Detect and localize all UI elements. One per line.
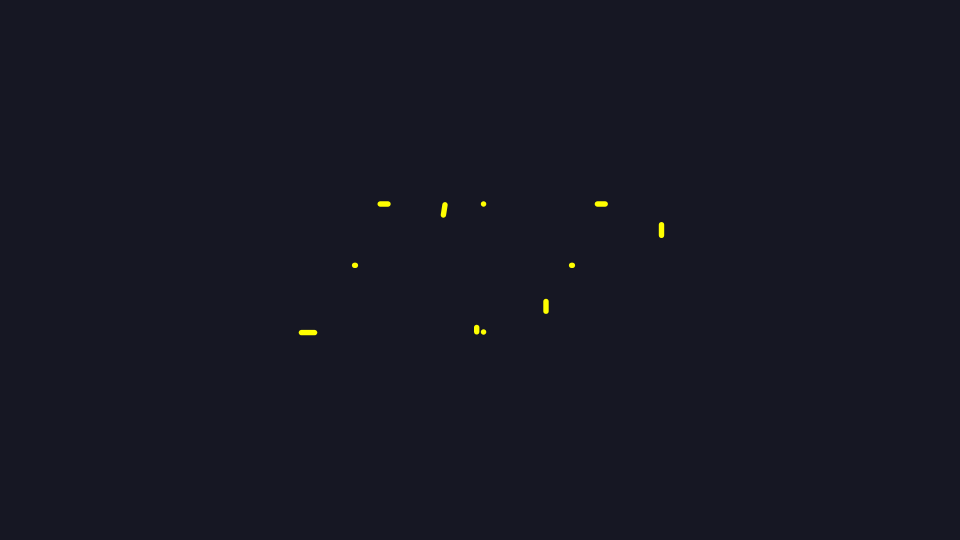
mark: bottom centre dot: [481, 329, 486, 335]
mark: tilted dash: [443, 205, 445, 215]
mark: bottom-left horizontal dash: [301, 330, 315, 335]
mark: right vertical dash: [659, 225, 664, 235]
mark: top-left horizontal dash: [380, 201, 388, 207]
mark: left middle dot: [352, 263, 358, 268]
mark: bottom centre vertical dash: [474, 327, 479, 332]
mark: right middle dot: [569, 263, 575, 268]
mark: top centre dot: [481, 201, 486, 207]
mark: lower vertical dash: [543, 301, 549, 311]
mark: top-right horizontal dash: [597, 201, 605, 207]
